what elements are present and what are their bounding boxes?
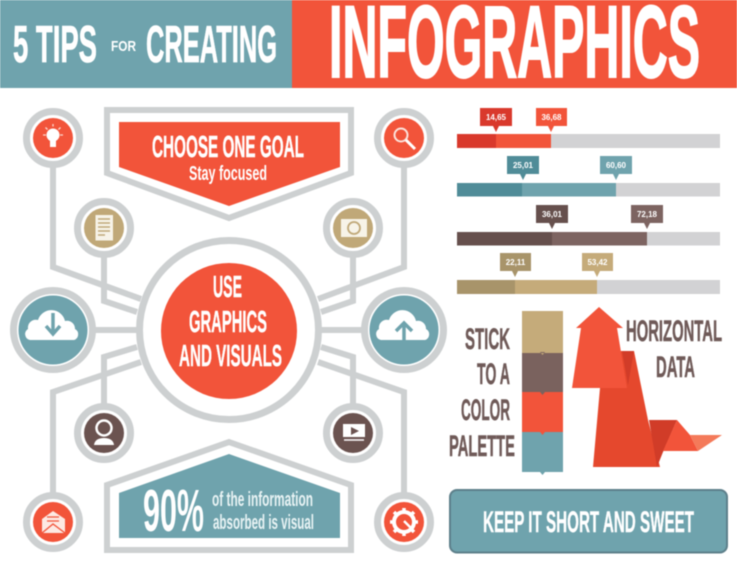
header band [0, 0, 737, 99]
panel: use graphics and visuals [140, 240, 318, 420]
text: stick to a color palette: TO A [477, 358, 510, 391]
subtitle: 5 tips for creating: FOR [111, 38, 136, 55]
connector lines [53, 165, 404, 495]
bar row: tan [457, 253, 720, 294]
icon: video monitor [326, 406, 380, 460]
icon: gear and wrench [378, 496, 430, 548]
bar row: brown [457, 205, 720, 246]
icon: light bulb [26, 112, 80, 164]
icon: cloud upload [364, 290, 444, 370]
text: PALETTE [449, 430, 515, 463]
header band: CREATING [146, 16, 277, 74]
button: keep it short and sweet [450, 490, 727, 552]
subtitle: 5 tips for creating: 5 TIPS [13, 16, 97, 74]
text: of the information absorbed is visual: of the information [212, 489, 313, 511]
text: of the information absorbed is visual [212, 489, 314, 534]
icon: webcam [78, 406, 130, 460]
bar row: teal: 25,01 [513, 161, 534, 170]
icon: envelope [26, 496, 80, 548]
text: stay focused: Stay focused [189, 163, 267, 185]
text: horizontal data: DATA [656, 351, 695, 384]
bar row: teal [457, 156, 720, 196]
bar row: tan: 53,42 [587, 258, 608, 267]
icon: camera [326, 202, 380, 254]
text: stick to a color palette: STICK [465, 323, 510, 356]
text: use graphics and visuals [179, 269, 282, 373]
text: use graphics and visuals: GRAPHICS [189, 304, 267, 339]
subtitle: 5 tips for creating [13, 16, 277, 74]
bar row: brown: 36,01 [542, 210, 563, 219]
number: 90%: 90% [143, 478, 204, 544]
bar row: red [457, 108, 720, 148]
bar row: brown: 72,18 [637, 210, 658, 219]
text: COLOR [461, 394, 510, 427]
bar row: teal: 60,60 [606, 161, 627, 170]
text: of the information absorbed is visual: absorbed is visual [213, 512, 314, 534]
text: use graphics and visuals: USE [213, 269, 242, 304]
icon: cloud download [14, 290, 92, 370]
bar chart: horizontal data bars [457, 108, 720, 294]
text: stick to a color palette [449, 323, 515, 463]
panel: use graphics and visuals: AND VISUALS [179, 338, 282, 373]
icon: document [78, 202, 130, 254]
bar row: red: 14,65 [486, 113, 507, 122]
bar row: red: 36,68 [541, 113, 562, 122]
panel: choose one goal [107, 110, 351, 218]
panel: 90 percent statistic [107, 442, 351, 550]
bar row: tan: 22,11 [506, 258, 526, 267]
icon: magnifier [378, 112, 430, 164]
arrow: folded ribbon [572, 307, 722, 467]
text: horizontal data [626, 315, 722, 384]
panel: choose one goal: CHOOSE ONE GOAL [152, 129, 304, 164]
color palette swatches [522, 311, 563, 475]
